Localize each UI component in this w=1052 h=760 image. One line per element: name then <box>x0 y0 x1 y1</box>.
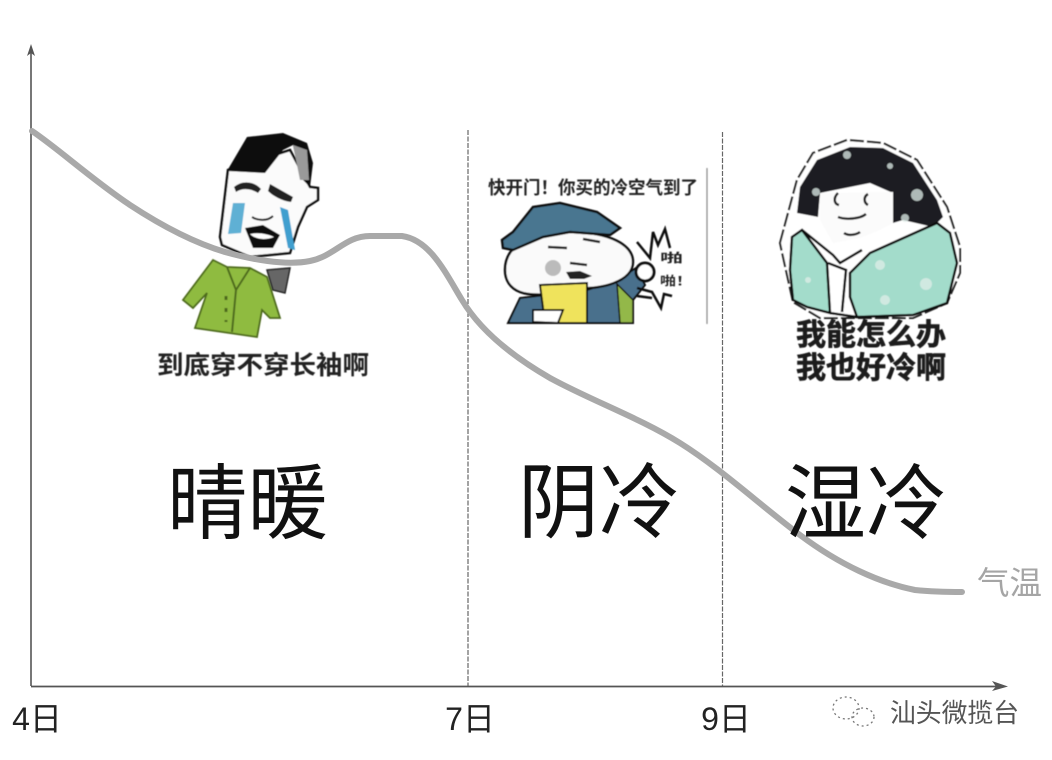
meme: crying man with green jacket <box>157 133 369 380</box>
icon: green vest <box>617 284 633 323</box>
icon: yellow clipboard <box>540 283 587 323</box>
watermark <box>833 697 1019 728</box>
label: knock sound 2: 啪！ <box>660 273 692 288</box>
icon: quilt collar lines <box>802 230 862 317</box>
icon: facial features <box>545 239 600 279</box>
meme: delivery man knocking <box>488 168 707 324</box>
icon: face <box>820 192 893 243</box>
icon: round head <box>505 232 633 295</box>
y axis <box>27 44 35 686</box>
icon: black hair <box>797 147 943 227</box>
icon: dashed outline <box>780 140 960 318</box>
icon: uniform body <box>508 268 645 323</box>
icon: snowflakes <box>805 151 932 305</box>
icon: blue cap <box>502 203 620 250</box>
icon: mint quilt left <box>790 230 830 313</box>
tick label: 9日: 9日 <box>701 701 751 737</box>
icon: wechat logo <box>833 697 874 726</box>
caption: 我也好冷啊: 我也好冷啊 <box>796 352 946 385</box>
icon: knocking fist <box>636 263 654 281</box>
heading: 晴暖: 晴暖 <box>167 459 328 550</box>
tick label: 4日: 4日 <box>12 701 62 737</box>
icon: green jacket <box>183 260 280 337</box>
icon: knock burst top <box>637 229 670 258</box>
icon: facial features <box>835 193 868 235</box>
divider: day 7 <box>467 130 469 686</box>
label: 气温: 气温 <box>977 565 1042 601</box>
panel edge <box>706 168 708 324</box>
meme: person wrapped in quilt <box>780 140 960 385</box>
icon: mint quilt right <box>850 223 957 317</box>
icon: knock burst bottom <box>637 288 672 308</box>
x axis <box>31 681 1008 691</box>
caption: 快开门!你买的冷空气到了: 快开门！你买的冷空气到了 <box>488 177 698 198</box>
icon: dark shirt behind jacket <box>267 268 290 293</box>
temperature curve <box>32 131 962 592</box>
heading: 湿冷: 湿冷 <box>785 459 947 550</box>
divider: day 9 <box>722 132 724 686</box>
icon: hand <box>533 310 563 323</box>
heading: 阴冷: 阴冷 <box>518 458 680 549</box>
tick label: 7日: 7日 <box>445 701 495 737</box>
icon: face <box>220 133 318 257</box>
label: knock sound 1: 啪 <box>660 250 683 265</box>
caption: 到底穿不穿长袖啊: 到底穿不穿长袖啊 <box>157 352 369 380</box>
caption: 我能怎么办: 我能怎么办 <box>796 319 946 352</box>
label: 汕头微揽台: 汕头微揽台 <box>890 698 1019 728</box>
